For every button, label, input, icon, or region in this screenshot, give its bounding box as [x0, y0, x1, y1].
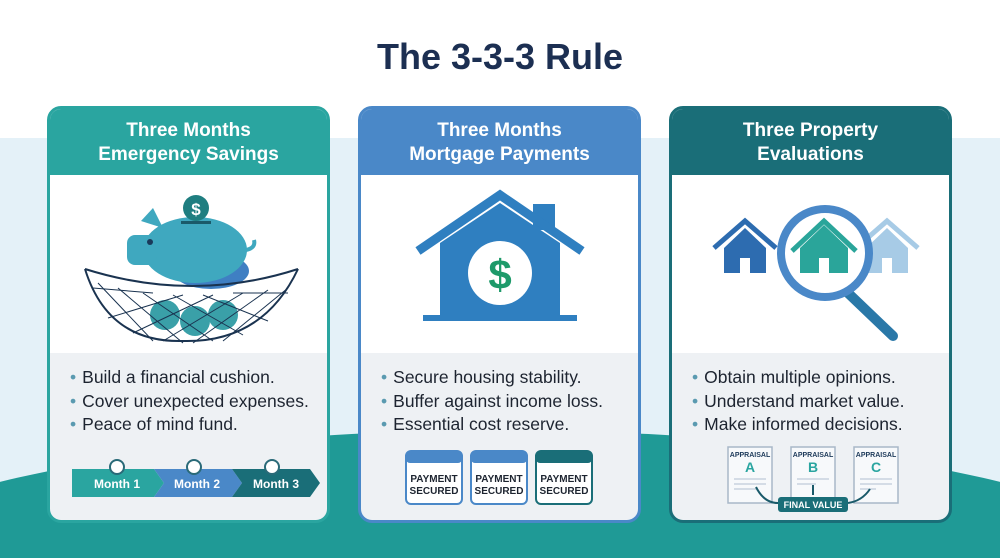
icon: piggy bank in net: $	[191, 200, 201, 219]
text block: Cover unexpected expenses.	[82, 390, 309, 410]
icons: appraisals to final value: APPRAISAL	[730, 452, 771, 459]
icon: house with dollar: $	[488, 251, 512, 298]
progress: months: Month 1	[94, 477, 140, 491]
text block	[692, 367, 905, 434]
icons: appraisals to final value: APPRAISAL	[793, 452, 834, 459]
text block: Build a financial cushion.	[82, 367, 275, 387]
icons: payment calendars: PAYMENT	[410, 474, 458, 485]
heading: Emergency Savings	[98, 144, 279, 165]
icons: appraisals to final value: C	[871, 459, 881, 475]
icons: appraisals to final value	[727, 446, 899, 512]
heading	[50, 109, 327, 175]
icons: payment calendars: PAYMENT	[475, 474, 523, 485]
icons: payment calendars: PAYMENT	[540, 474, 588, 485]
heading	[672, 109, 949, 175]
heading: Three Property	[743, 120, 878, 141]
icons: payment calendars: SECURED	[475, 486, 523, 497]
icon: piggy bank in net	[50, 175, 327, 353]
heading: Three Months	[126, 120, 251, 141]
progress: months: Month 3	[253, 477, 299, 491]
panel: emergency savings	[47, 106, 330, 523]
panel: mortgage payments	[358, 106, 641, 523]
text block	[70, 367, 309, 434]
text block: Buffer against income loss.	[393, 390, 603, 410]
heading: Evaluations	[757, 144, 864, 165]
icons: payment calendars	[405, 450, 593, 505]
text block: Secure housing stability.	[393, 367, 582, 387]
heading: Mortgage Payments	[409, 144, 590, 165]
icons: appraisals to final value: FINAL VALUE	[784, 500, 842, 510]
icons: appraisals to final value: B	[808, 459, 818, 475]
text block: Essential cost reserve.	[393, 414, 569, 434]
text block	[382, 367, 603, 434]
progress: months: Month 2	[174, 477, 220, 491]
icons: payment calendars: SECURED	[410, 486, 458, 497]
icons: payment calendars: SECURED	[540, 486, 588, 497]
heading: Three Months	[437, 120, 562, 141]
icon: house with dollar	[361, 175, 638, 353]
text block: Understand market value.	[704, 390, 905, 410]
icons: appraisals to final value: APPRAISAL	[856, 452, 897, 459]
progress: months	[72, 459, 320, 497]
background band	[0, 138, 1000, 558]
heading	[361, 109, 638, 175]
text block: Peace of mind fund.	[82, 414, 238, 434]
title: The 3-3-3 Rule	[377, 36, 623, 77]
icon: houses with magnifier	[672, 175, 949, 353]
text block: Make informed decisions.	[704, 414, 903, 434]
icons: appraisals to final value: A	[745, 459, 755, 475]
text block: Obtain multiple opinions.	[704, 367, 896, 387]
panel: property evaluations	[669, 106, 952, 523]
